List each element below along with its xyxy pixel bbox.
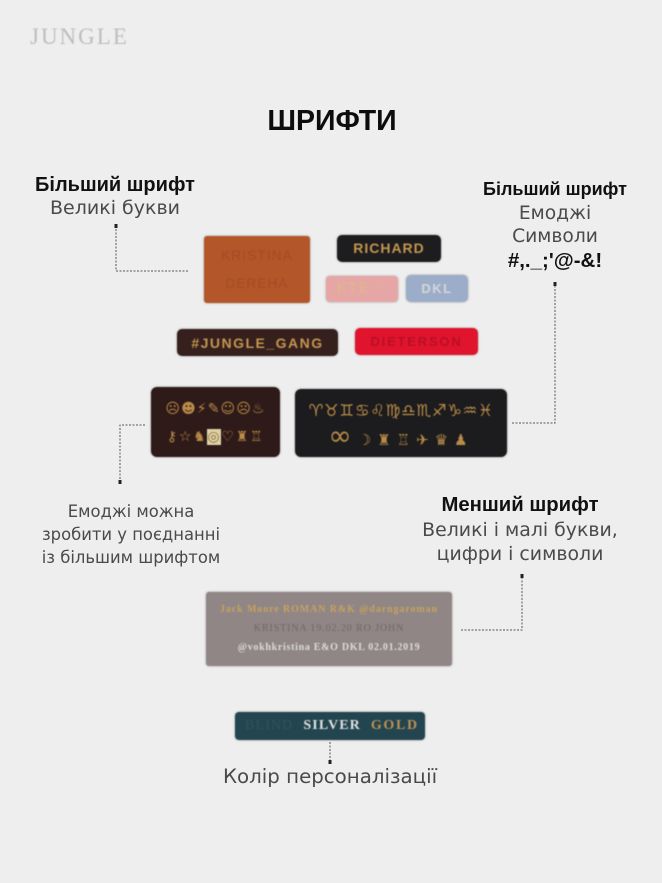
patch: brown emoji: ☹☻⚡✎☺☹♨ bbox=[165, 401, 266, 417]
text: emoji combination note: Емоджі можна bbox=[68, 502, 194, 521]
patch: blue DKL bbox=[406, 275, 468, 302]
patch: orange KRISTINA DEREHA: DEREHA bbox=[225, 276, 289, 290]
patch: black zodiac symbols: ♈♉♊♋♌♍♎♏♐♑♒♓ bbox=[309, 401, 493, 420]
text: larger font, emoji and symbols: Емоджі bbox=[519, 202, 591, 224]
patch: RICHARD bbox=[337, 235, 441, 262]
patch: grey small font samples: Jack Moore ROMAN R&K @darngaroman bbox=[220, 604, 438, 615]
patch: #JUNGLE_GANG bbox=[177, 329, 338, 356]
text: larger font, capital letters bbox=[35, 174, 195, 218]
patch: personalisation colours bbox=[235, 712, 425, 740]
patch: orange KRISTINA DEREHA bbox=[204, 236, 310, 303]
text: smaller font: цифри і символи bbox=[437, 543, 603, 565]
text: emoji combination note: зробити у поєднанні bbox=[42, 525, 220, 544]
patch: grey small font samples bbox=[206, 592, 452, 666]
text: larger font, emoji and symbols: Більший шрифт bbox=[483, 179, 627, 199]
text: emoji combination note: із більшим шрифтом bbox=[42, 548, 220, 567]
text: personalisation colour caption: Колір персоналізації bbox=[223, 765, 437, 788]
text: smaller font: Великі і малі букви, bbox=[422, 518, 618, 540]
patch: personalisation colours: BLIND bbox=[245, 718, 293, 733]
patch: brown emoji: ⚷☆♞◎♡♜♖ bbox=[167, 429, 264, 445]
patch: blue DKL: DKL bbox=[421, 281, 453, 296]
patch: black zodiac symbols bbox=[295, 389, 507, 457]
text: larger font, emoji and symbols: #,._;'@-&! bbox=[508, 248, 602, 272]
text: larger font, capital letters: Більший шрифт bbox=[35, 174, 195, 196]
patch: grey small font samples: @vokhkristina E&O DKL 02.01.2019 bbox=[238, 642, 420, 653]
patch: personalisation colours: GOLD bbox=[371, 718, 419, 733]
logo: JUNGLE bbox=[30, 24, 129, 49]
patch: black zodiac symbols: ∞☽♜♖✈♛♟ bbox=[328, 419, 474, 452]
patch: brown emoji bbox=[151, 387, 280, 457]
text: larger font, emoji and symbols bbox=[483, 179, 627, 272]
text: smaller font: Менший шрифт bbox=[441, 494, 599, 516]
patch: grey small font samples: KRISTINA 19.02.20 RO JOHN bbox=[254, 623, 404, 634]
text: larger font, capital letters: Великі букви bbox=[50, 196, 180, 218]
patch: pink KTE: KTE♡ bbox=[337, 281, 387, 297]
text: smaller font bbox=[422, 494, 618, 565]
title: ШРИФТИ bbox=[267, 105, 397, 137]
patch: orange KRISTINA DEREHA: KRISTINA bbox=[221, 248, 293, 262]
patch: personalisation colours: SILVER bbox=[303, 718, 361, 733]
patch: red DIETERSON: DIETERSON bbox=[370, 334, 463, 349]
patch: pink KTE bbox=[326, 276, 398, 302]
patch: RICHARD: RICHARD bbox=[353, 240, 425, 256]
patch: red DIETERSON bbox=[355, 328, 478, 355]
text: larger font, emoji and symbols: Символи bbox=[512, 226, 598, 247]
patch: #JUNGLE_GANG: #JUNGLE_GANG bbox=[191, 334, 324, 350]
text: emoji combination note bbox=[42, 502, 220, 567]
